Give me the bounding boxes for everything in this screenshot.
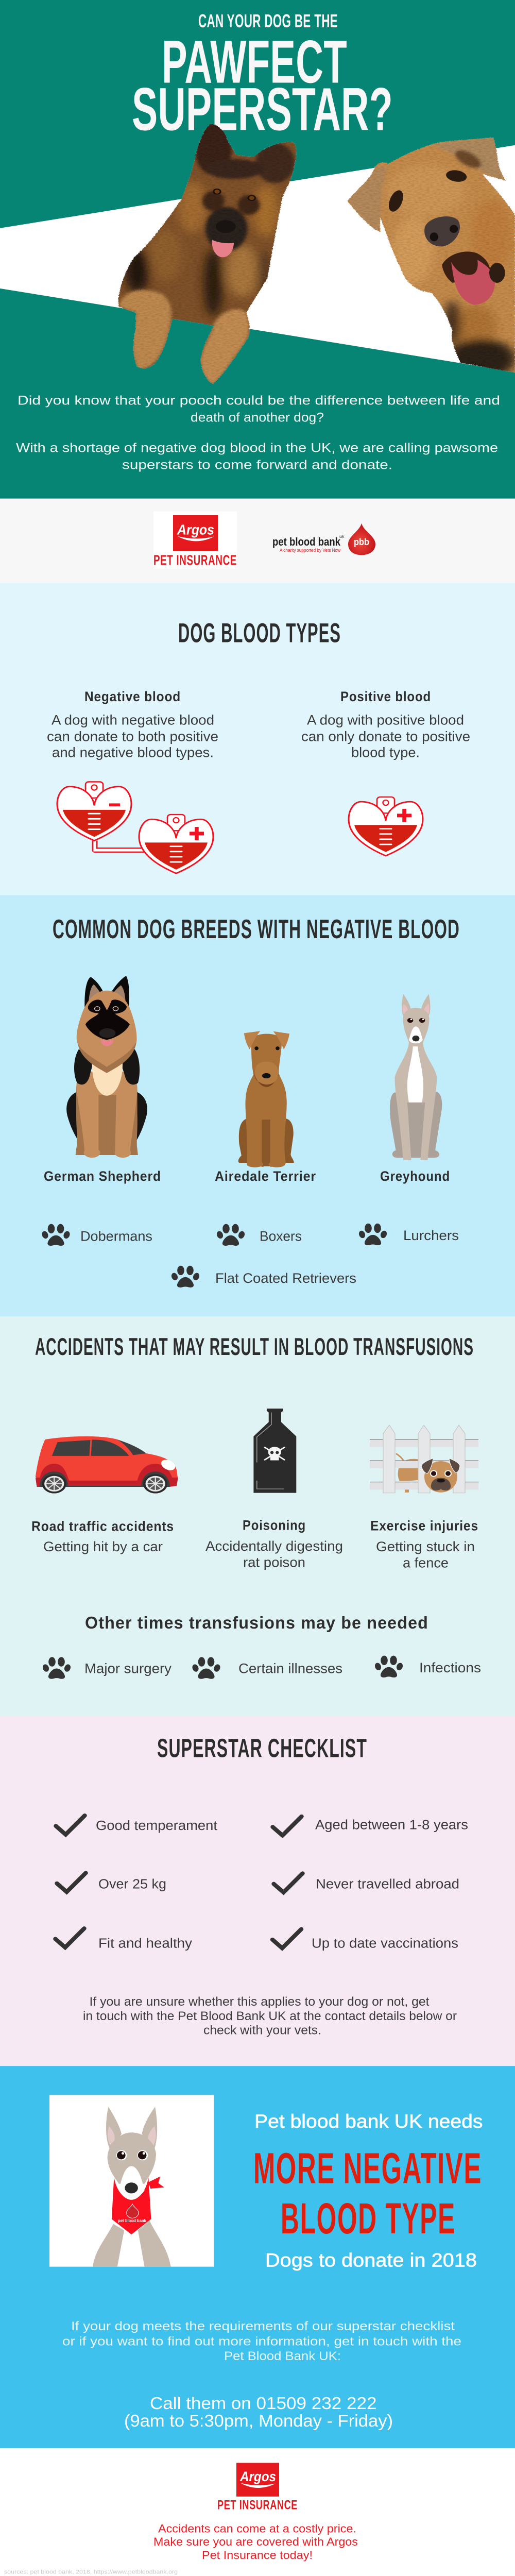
text: exercise injuries: a fence [403,1555,449,1570]
logo: pet blood bank [272,523,375,555]
labels: breed names: Airedale Terrier [215,1168,316,1184]
heading: checklist: SUPERSTAR CHECKLIST [157,1734,367,1763]
checklist items: Up to date vaccinations [312,1936,458,1951]
column: positive blood [301,689,470,760]
text: insurance message [153,2522,358,2562]
icon: poison bottle [253,1409,296,1493]
checklist items: Over 25 kg [98,1876,166,1891]
icon: red car [36,1436,178,1494]
text: poisoning [205,1518,343,1570]
logo: Argos Pet Insurance: Argos [177,522,214,538]
intro text: death of another dog? [191,411,324,425]
column: negative blood: can donate to both positive [47,728,218,744]
column: positive blood: can only donate to positive [301,728,470,744]
column: negative blood: Negative blood [84,689,181,704]
panel: common breeds [0,895,515,1316]
column: positive blood: A dog with positive blood [307,713,464,727]
checklist items: Aged between 1-8 years [315,1818,468,1832]
callout: more negative blood type: Dogs to donate in 2018 [265,2250,477,2271]
text: requirements note: or if you want to find out more information, get in touch with the [62,2334,461,2348]
intro text: superstars to come forward and donate. [122,459,392,472]
text: road traffic accidents: Road traffic accidents [31,1519,174,1534]
callout: more negative blood type: Pet blood bank UK needs [254,2111,483,2132]
heading: dog blood types: DOG BLOOD TYPES [178,617,341,648]
list: other times: Certain illnesses [238,1661,342,1676]
logo: Argos Pet Insurance: PET INSURANCE [153,553,237,568]
panel: call to action [0,2066,515,2448]
text: requirements note: If your dog meets the requirements of our superstar checklist [71,2319,455,2333]
logo: Argos Pet Insurance [153,512,237,569]
text: unsure note: check with your vets. [203,2023,321,2037]
column: negative blood: A dog with negative blood [52,713,214,727]
photo: German Shepherd [113,119,303,386]
logo: Argos Pet Insurance footer: PET INSURANCE [217,2499,298,2512]
list: other times: Infections [419,1660,481,1675]
column: negative blood: and negative blood types. [52,745,214,760]
list: other breeds: Lurchers [403,1228,459,1243]
photo: Airedale Terrier [345,135,515,379]
panel: dog blood types [0,583,515,895]
text: unsure note [83,1995,457,2037]
text: exercise injuries: Getting stuck in [376,1539,475,1554]
logo: pet blood bank: uk [339,534,345,539]
illustration: Airedale Terrier [238,1031,294,1167]
icon: negative blood bag donating to positive bag [57,782,213,873]
text: unsure note: If you are unsure whether this applies to your dog or not, get [90,1995,430,2009]
logo: pet blood bank: A charity supported by Vets Now [280,548,340,553]
text: exercise injuries: Exercise injuries [370,1518,478,1533]
logo: Argos Pet Insurance footer: Argos [239,2469,276,2484]
text: insurance message: Accidents can come at a costly price. [158,2522,356,2535]
text: poisoning: Poisoning [243,1518,306,1533]
labels: breed names [44,1168,450,1184]
intro text: With a shortage of negative dog blood in the UK, we are calling pawsome [16,441,498,455]
icon: dog stuck in fence [370,1425,478,1493]
list: other breeds: Flat Coated Retrievers [215,1270,356,1286]
labels: breed names: Greyhound [380,1168,450,1184]
text: requirements note [62,2319,461,2363]
title: CAN YOUR DOG BE THE [198,10,338,31]
title: PAWFECT [162,28,347,96]
text: phone number: (9am to 5:30pm, Monday - Friday) [124,2412,393,2431]
text: poisoning: Accidentally digesting [205,1538,343,1554]
checklist items: Good temperament [96,1818,218,1833]
icon: positive blood bag [349,797,423,856]
column: negative blood [47,689,218,760]
text: insurance message: Make sure you are covered with Argos [153,2535,358,2548]
intro text [16,394,500,472]
panel: accidents [0,1316,515,1716]
intro text: Did you know that your pooch could be the difference between life and [18,394,500,408]
text: exercise injuries [370,1518,478,1570]
checklist items: Fit and healthy [98,1936,193,1951]
text: road traffic accidents [31,1519,174,1554]
list: other times [42,1656,481,1679]
panel: logos [0,499,515,583]
list: other breeds: Dobermans [80,1228,152,1244]
checklist items [56,1816,468,1951]
illustration: German Shepherd [66,976,147,1158]
text: phone number [124,2394,393,2431]
illustration: greyhound with bandana [49,2095,214,2267]
text: poisoning: rat poison [243,1554,305,1570]
labels: breed names: German Shepherd [44,1168,161,1184]
list: other breeds: Boxers [260,1228,302,1244]
illustration: Greyhound [390,994,442,1160]
text: phone number: Call them on 01509 232 222 [150,2394,377,2413]
text: unsure note: in touch with the Pet Blood Bank UK at the contact details below or [83,2009,457,2023]
text: requirements note: Pet Blood Bank UK: [224,2349,341,2363]
text: insurance message: Pet Insurance today! [202,2549,313,2562]
list: other breeds [41,1224,459,1287]
illustration: greyhound with bandana: pet blood bank [118,2218,146,2223]
text: sources: sources: pet blood bank, 2018, https://www.petbloodbank.org [4,2569,178,2575]
text: road traffic accidents: Getting hit by a car [43,1539,163,1554]
panel: footer [0,2448,515,2576]
checklist items: Never travelled abroad [316,1876,459,1891]
logo: Argos Pet Insurance footer [217,2463,298,2512]
subheading: other times: Other times transfusions may be needed [85,1614,428,1633]
logo: pet blood bank: pbb [354,537,369,548]
column: positive blood: Positive blood [340,689,431,704]
callout: more negative blood type [253,2111,483,2271]
logo: pet blood bank: pet blood bank [272,535,340,548]
title [132,10,393,143]
panel: superstar checklist [0,1716,515,2066]
list: other times: Major surgery [84,1661,171,1676]
panel: hero [0,0,515,499]
column: positive blood: blood type. [351,745,420,760]
